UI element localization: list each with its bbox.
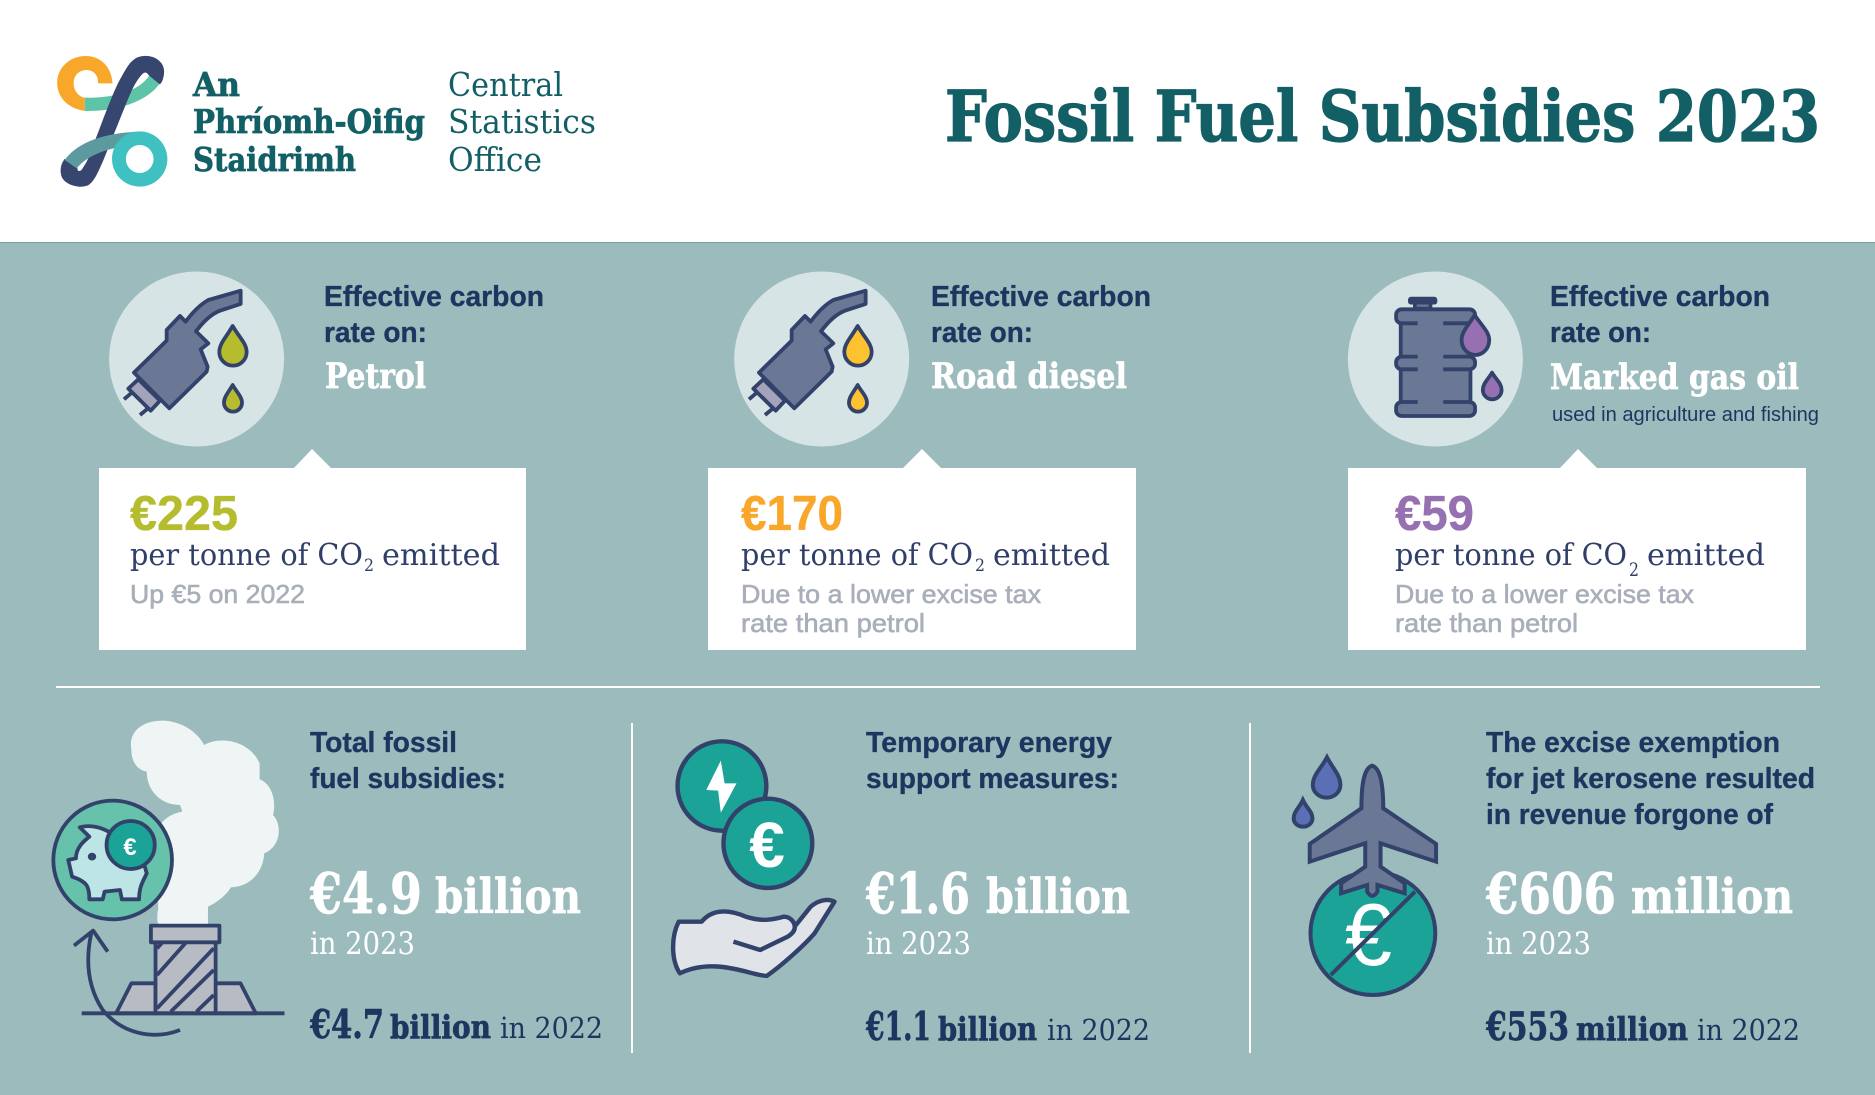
callout: petrol rate: Up €5 on 2022 [130,579,305,609]
callout: petrol rate: 2 [364,556,374,576]
logo name: English [448,65,596,179]
heading: petrol [324,281,544,397]
icon: petrol nozzle [109,272,284,446]
figure: 2022 revenue forgone: in 2022 [1697,1013,1800,1047]
callout: road diesel rate: 2 [975,556,985,576]
heading: jet kerosene exemption [1486,727,1815,831]
callout: marked gas oil rate: rate than petrol [1395,608,1578,638]
figure: 2022 support: in 2022 [1047,1013,1150,1047]
panel: jet kerosene exemption [1294,727,1815,1050]
panel: total fossil fuel subsidies [53,721,603,1048]
heading: jet kerosene exemption: for jet kerosene resulted [1486,763,1815,795]
logo name: Irish: Phríomh-Oifig [193,102,425,141]
logo name: English: Statistics [448,102,596,141]
icon: plane over crossed euro [1294,757,1436,995]
figure: 2023 total [309,861,581,962]
heading: jet kerosene exemption: The excise exemption [1486,727,1780,759]
heading: temporary energy support: support measures: [866,763,1119,795]
logo name: Irish: Staidrimh [193,140,356,179]
icon: plane over crossed euro: € [1345,885,1392,984]
figure: 2023 revenue forgone: in 2023 [1486,926,1591,962]
heading: petrol: Petrol [325,356,426,397]
figure: 2023 total: in 2023 [310,926,415,962]
figure: 2022 support: €1.1 [865,1004,931,1050]
heading: total fossil fuel subsidies [310,727,506,795]
icon: coins over open hand [673,741,834,976]
logo name: English: Central [448,65,563,104]
callout: marked gas oil rate: emitted [1647,538,1765,573]
callout: road diesel rate: €170 [741,487,843,541]
figure: 2023 support [865,861,1130,962]
heading: petrol: rate on: [324,317,427,349]
icon: oil barrel [1348,272,1523,446]
icon: coins over open hand: € [749,809,785,881]
panel: road diesel [708,272,1151,650]
icon: chimney, smoke and piggy bank: € [123,834,137,861]
heading: road diesel: Effective carbon [931,281,1151,313]
main background panel [0,242,1875,1095]
callout: marked gas oil rate: Due to a lower excise tax [1395,579,1694,609]
heading: total fossil fuel subsidies: Total fossil [310,727,457,759]
callout: petrol rate: emitted [382,538,500,573]
panel: temporary energy support [673,727,1150,1050]
callout: road diesel rate: rate than petrol [741,608,925,638]
callout: marked gas oil rate: 2 [1629,559,1639,581]
heading: jet kerosene exemption: in revenue forgone of [1486,799,1773,831]
figure: 2023 support: in 2023 [866,926,971,962]
callout: petrol rate: €225 [130,487,238,541]
heading: petrol: Effective carbon [324,281,544,313]
figure: 2023 total: billion [435,869,581,925]
logo name: Irish [192,65,425,179]
figure: 2022 total: billion [390,1008,491,1046]
callout: road diesel rate: Due to a lower excise tax [741,579,1041,609]
callout: petrol rate [99,449,526,650]
icon: diesel nozzle [734,272,909,446]
figure: 2023 revenue forgone: million [1631,869,1793,925]
heading: total fossil fuel subsidies: fuel subsidies: [310,763,506,795]
heading: temporary energy support [866,727,1119,795]
figure: 2023 support: billion [986,869,1130,925]
callout: petrol rate: per tonne of CO [130,538,363,573]
logo name: Irish: An [192,65,240,104]
logo mark [57,56,167,187]
figure: 2023 revenue forgone: €606 [1485,861,1616,927]
header [57,56,1820,187]
figure: 2022 total: in 2022 [500,1011,603,1045]
figure: 2022 revenue forgone: €553 [1485,1004,1569,1050]
callout: road diesel rate: per tonne of CO [741,538,973,573]
heading: road diesel: rate on: [931,317,1033,349]
heading: marked gas oil: Effective carbon [1550,281,1770,313]
heading: temporary energy support: Temporary energy [866,727,1112,759]
figure: 2023 revenue forgone [1485,861,1793,962]
figure: 2023 total: €4.9 [309,861,422,927]
callout: marked gas oil rate: per tonne of CO [1395,538,1627,573]
heading: marked gas oil: Marked gas oil [1550,357,1799,398]
icon: chimney, smoke and piggy bank [53,721,284,1035]
figure: 2023 support: €1.6 [865,861,970,927]
figure: 2022 support: billion [938,1010,1037,1048]
figure: 2022 total: €4.7 [309,1002,384,1048]
heading: marked gas oil [1550,281,1819,426]
panel: marked gas oil [1348,272,1819,650]
heading: road diesel [931,281,1151,397]
figure: 2022 revenue forgone: million [1576,1010,1688,1048]
logo name: English: Office [448,140,542,179]
callout: marked gas oil rate [1348,449,1806,650]
callout: road diesel rate: emitted [993,538,1110,573]
callout: road diesel rate [708,449,1136,650]
heading: marked gas oil: rate on: [1550,317,1651,349]
heading: road diesel: Road diesel [931,356,1127,397]
callout: marked gas oil rate: €59 [1395,487,1474,541]
panel: petrol [99,272,544,650]
heading: marked gas oil: used in agriculture and fishing [1552,404,1819,426]
